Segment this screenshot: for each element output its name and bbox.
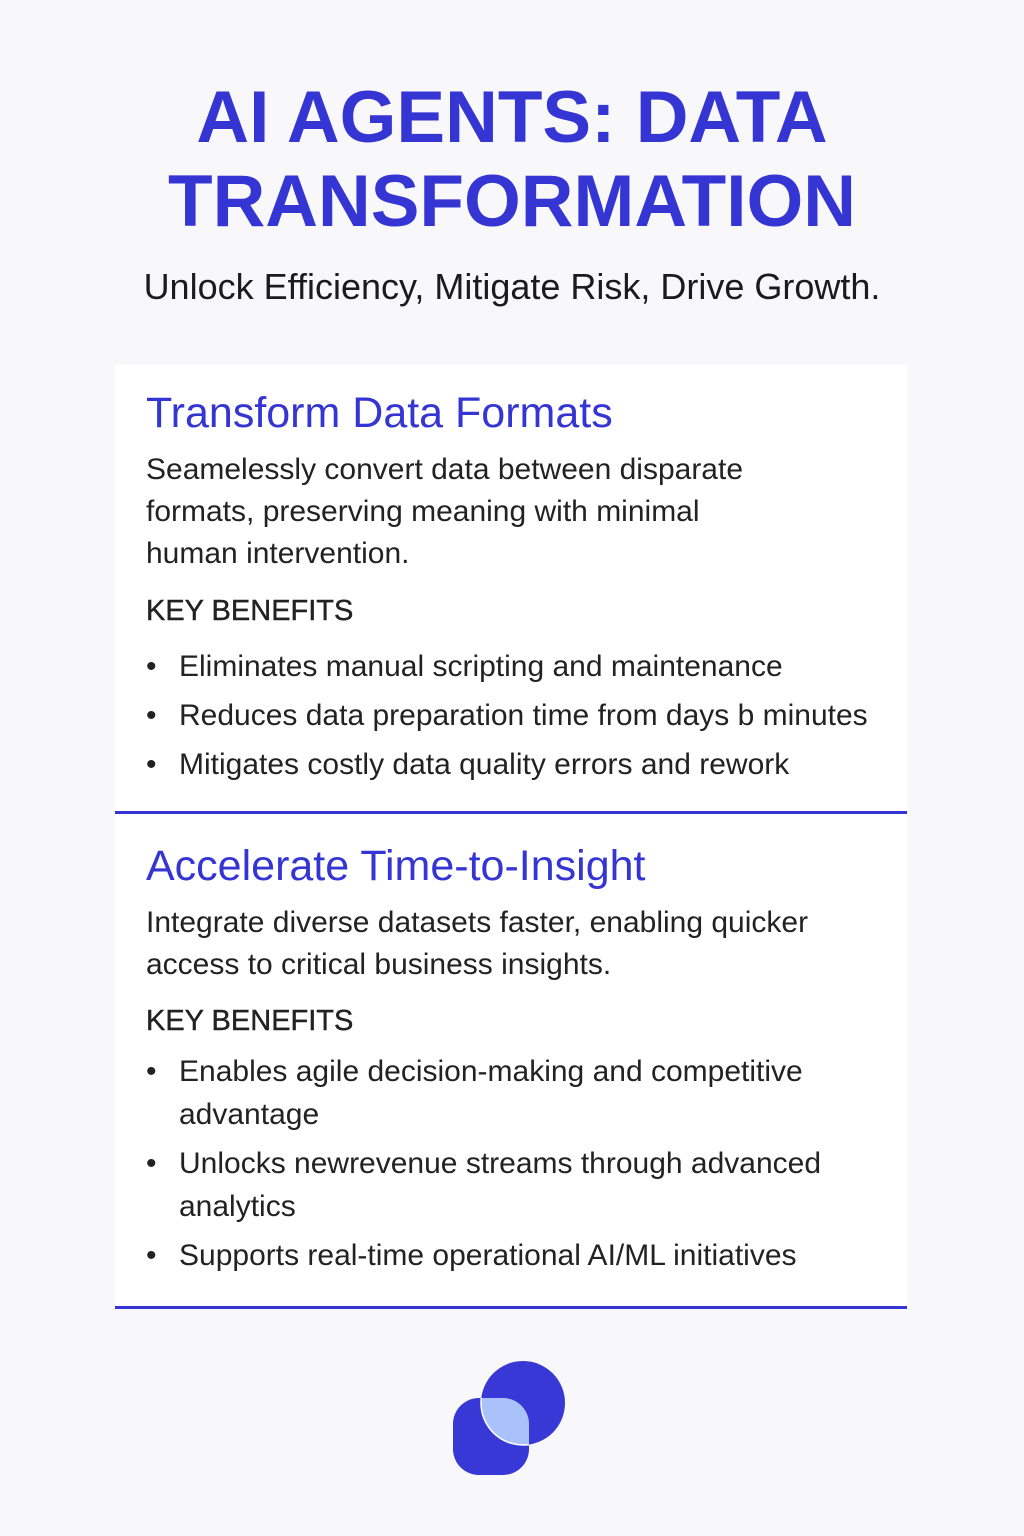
label: key benefits: KEY BENEFITS [146, 595, 353, 627]
panel: accelerate time-to-insight [115, 814, 907, 1309]
bullet list: Eliminates manual scripting and maintenance [179, 650, 783, 683]
heading: Transform Data Formats [146, 389, 613, 437]
bullet list: Reduces data preparation time from days b minutes [179, 699, 868, 732]
bullet list: Supports real-time operational AI/ML initiatives [179, 1239, 797, 1272]
bullet list: Unlocks newrevenue streams through advanced analytics [179, 1147, 821, 1223]
description: Integrate diverse datasets faster, enabling quicker access to critical business insights. [146, 906, 808, 981]
panel: transform data formats [115, 365, 907, 814]
label: key benefits: KEY BENEFITS [146, 1005, 353, 1037]
title [168, 77, 856, 242]
subtitle: Unlock Efficiency, Mitigate Risk, Drive Growth. [144, 266, 880, 307]
title: AI AGENTS: DATA [196, 77, 828, 158]
bullet list [147, 1055, 821, 1272]
bullet list: Enables agile decision-making and competitive advantage [179, 1055, 803, 1131]
bullet list [147, 650, 868, 781]
description: Seamelessly convert data between disparate formats, preserving meaning with minimal human intervention. [146, 453, 743, 570]
title: TRANSFORMATION [168, 161, 856, 242]
icon: logo [453, 1361, 565, 1475]
heading: Accelerate Time-to-Insight [146, 842, 645, 890]
bullet list: Mitigates costly data quality errors and rework [179, 748, 789, 781]
